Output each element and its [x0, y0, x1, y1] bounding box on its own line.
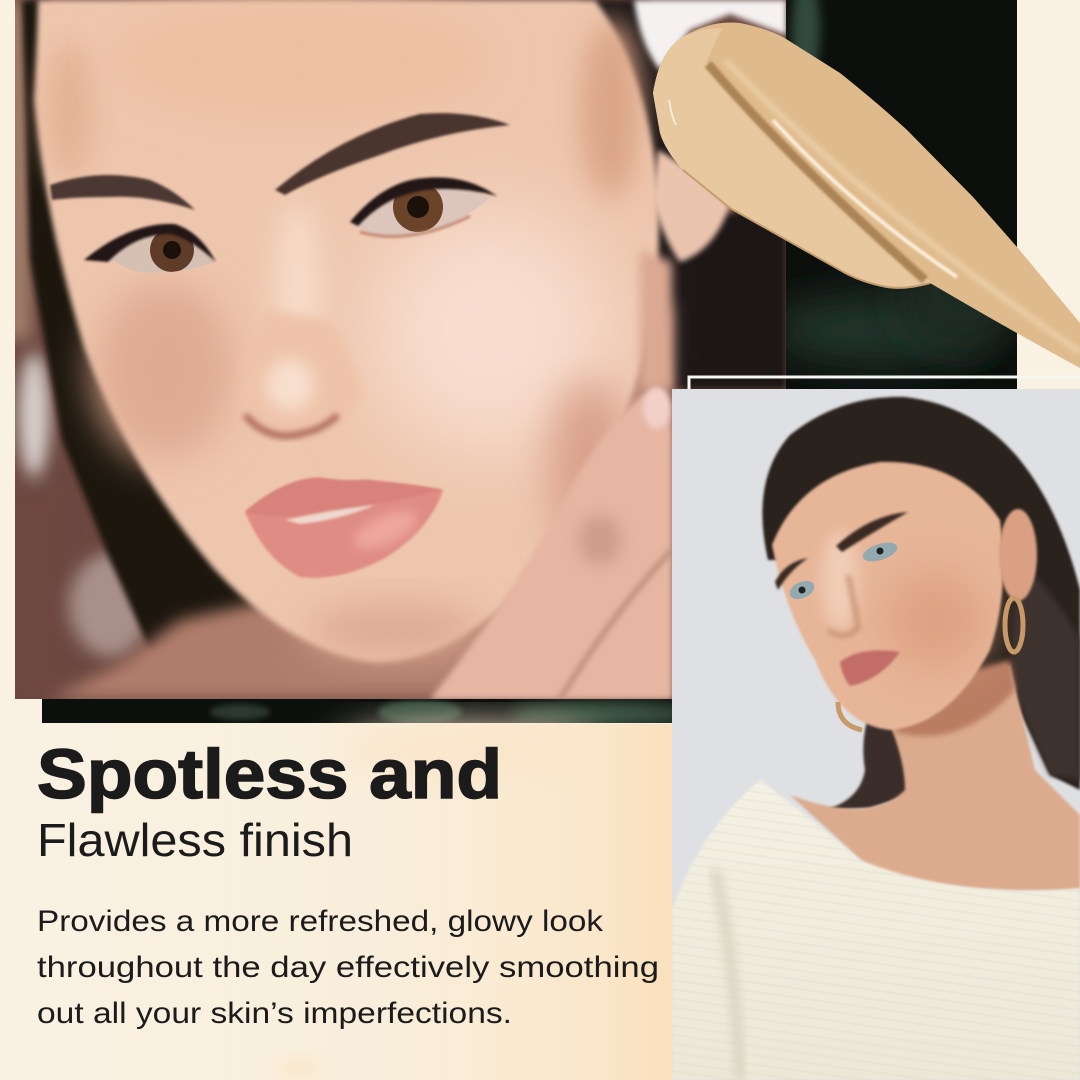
body text: [37, 905, 659, 1030]
photo: second portrait: [672, 389, 1080, 1080]
white hair flower: [634, 0, 786, 70]
nose: [238, 310, 362, 436]
nose: [828, 575, 858, 636]
eyes: [790, 542, 898, 600]
wavy hair left of neck: [830, 722, 907, 810]
photo: main close-up portrait: [5, 0, 786, 699]
dark hair right: [580, 0, 786, 389]
lips: [840, 650, 900, 686]
body text: out all your skin’s imperfections.: [37, 997, 512, 1030]
brows: [775, 512, 908, 590]
ear: [652, 150, 730, 262]
facial light and shade: [46, 0, 640, 656]
dark hair left: [22, 0, 285, 650]
ear: [999, 509, 1037, 601]
product swatch: foundation smear: [653, 23, 1080, 368]
subheading: Flawless finish: Flawless finish: [37, 814, 353, 866]
face shape: [35, 0, 659, 662]
lips: [245, 478, 443, 578]
face: [772, 462, 1003, 730]
heading: Spotless and: Spotless and: [37, 735, 502, 813]
eyebrows: [50, 113, 510, 210]
panel: text background: [0, 700, 672, 1080]
body text: throughout the day effectively smoothing: [37, 951, 659, 984]
panel: dark foliage backdrop: [42, 0, 1020, 726]
hoop earrings: [838, 598, 1023, 730]
body text: Provides a more refreshed, glowy look: [37, 905, 604, 938]
right eye: [350, 177, 497, 236]
sweater: [672, 780, 1080, 1080]
hair crown: [762, 397, 1080, 790]
long wavy hair right: [1010, 560, 1080, 780]
white frame line: [689, 377, 1080, 389]
neck under ear: [640, 250, 672, 389]
left eye: [84, 224, 216, 273]
neck and chest: [790, 665, 1080, 891]
neck and lower skin: [50, 300, 672, 699]
blurred left background: [15, 0, 145, 664]
hand and fingers: [430, 387, 672, 699]
